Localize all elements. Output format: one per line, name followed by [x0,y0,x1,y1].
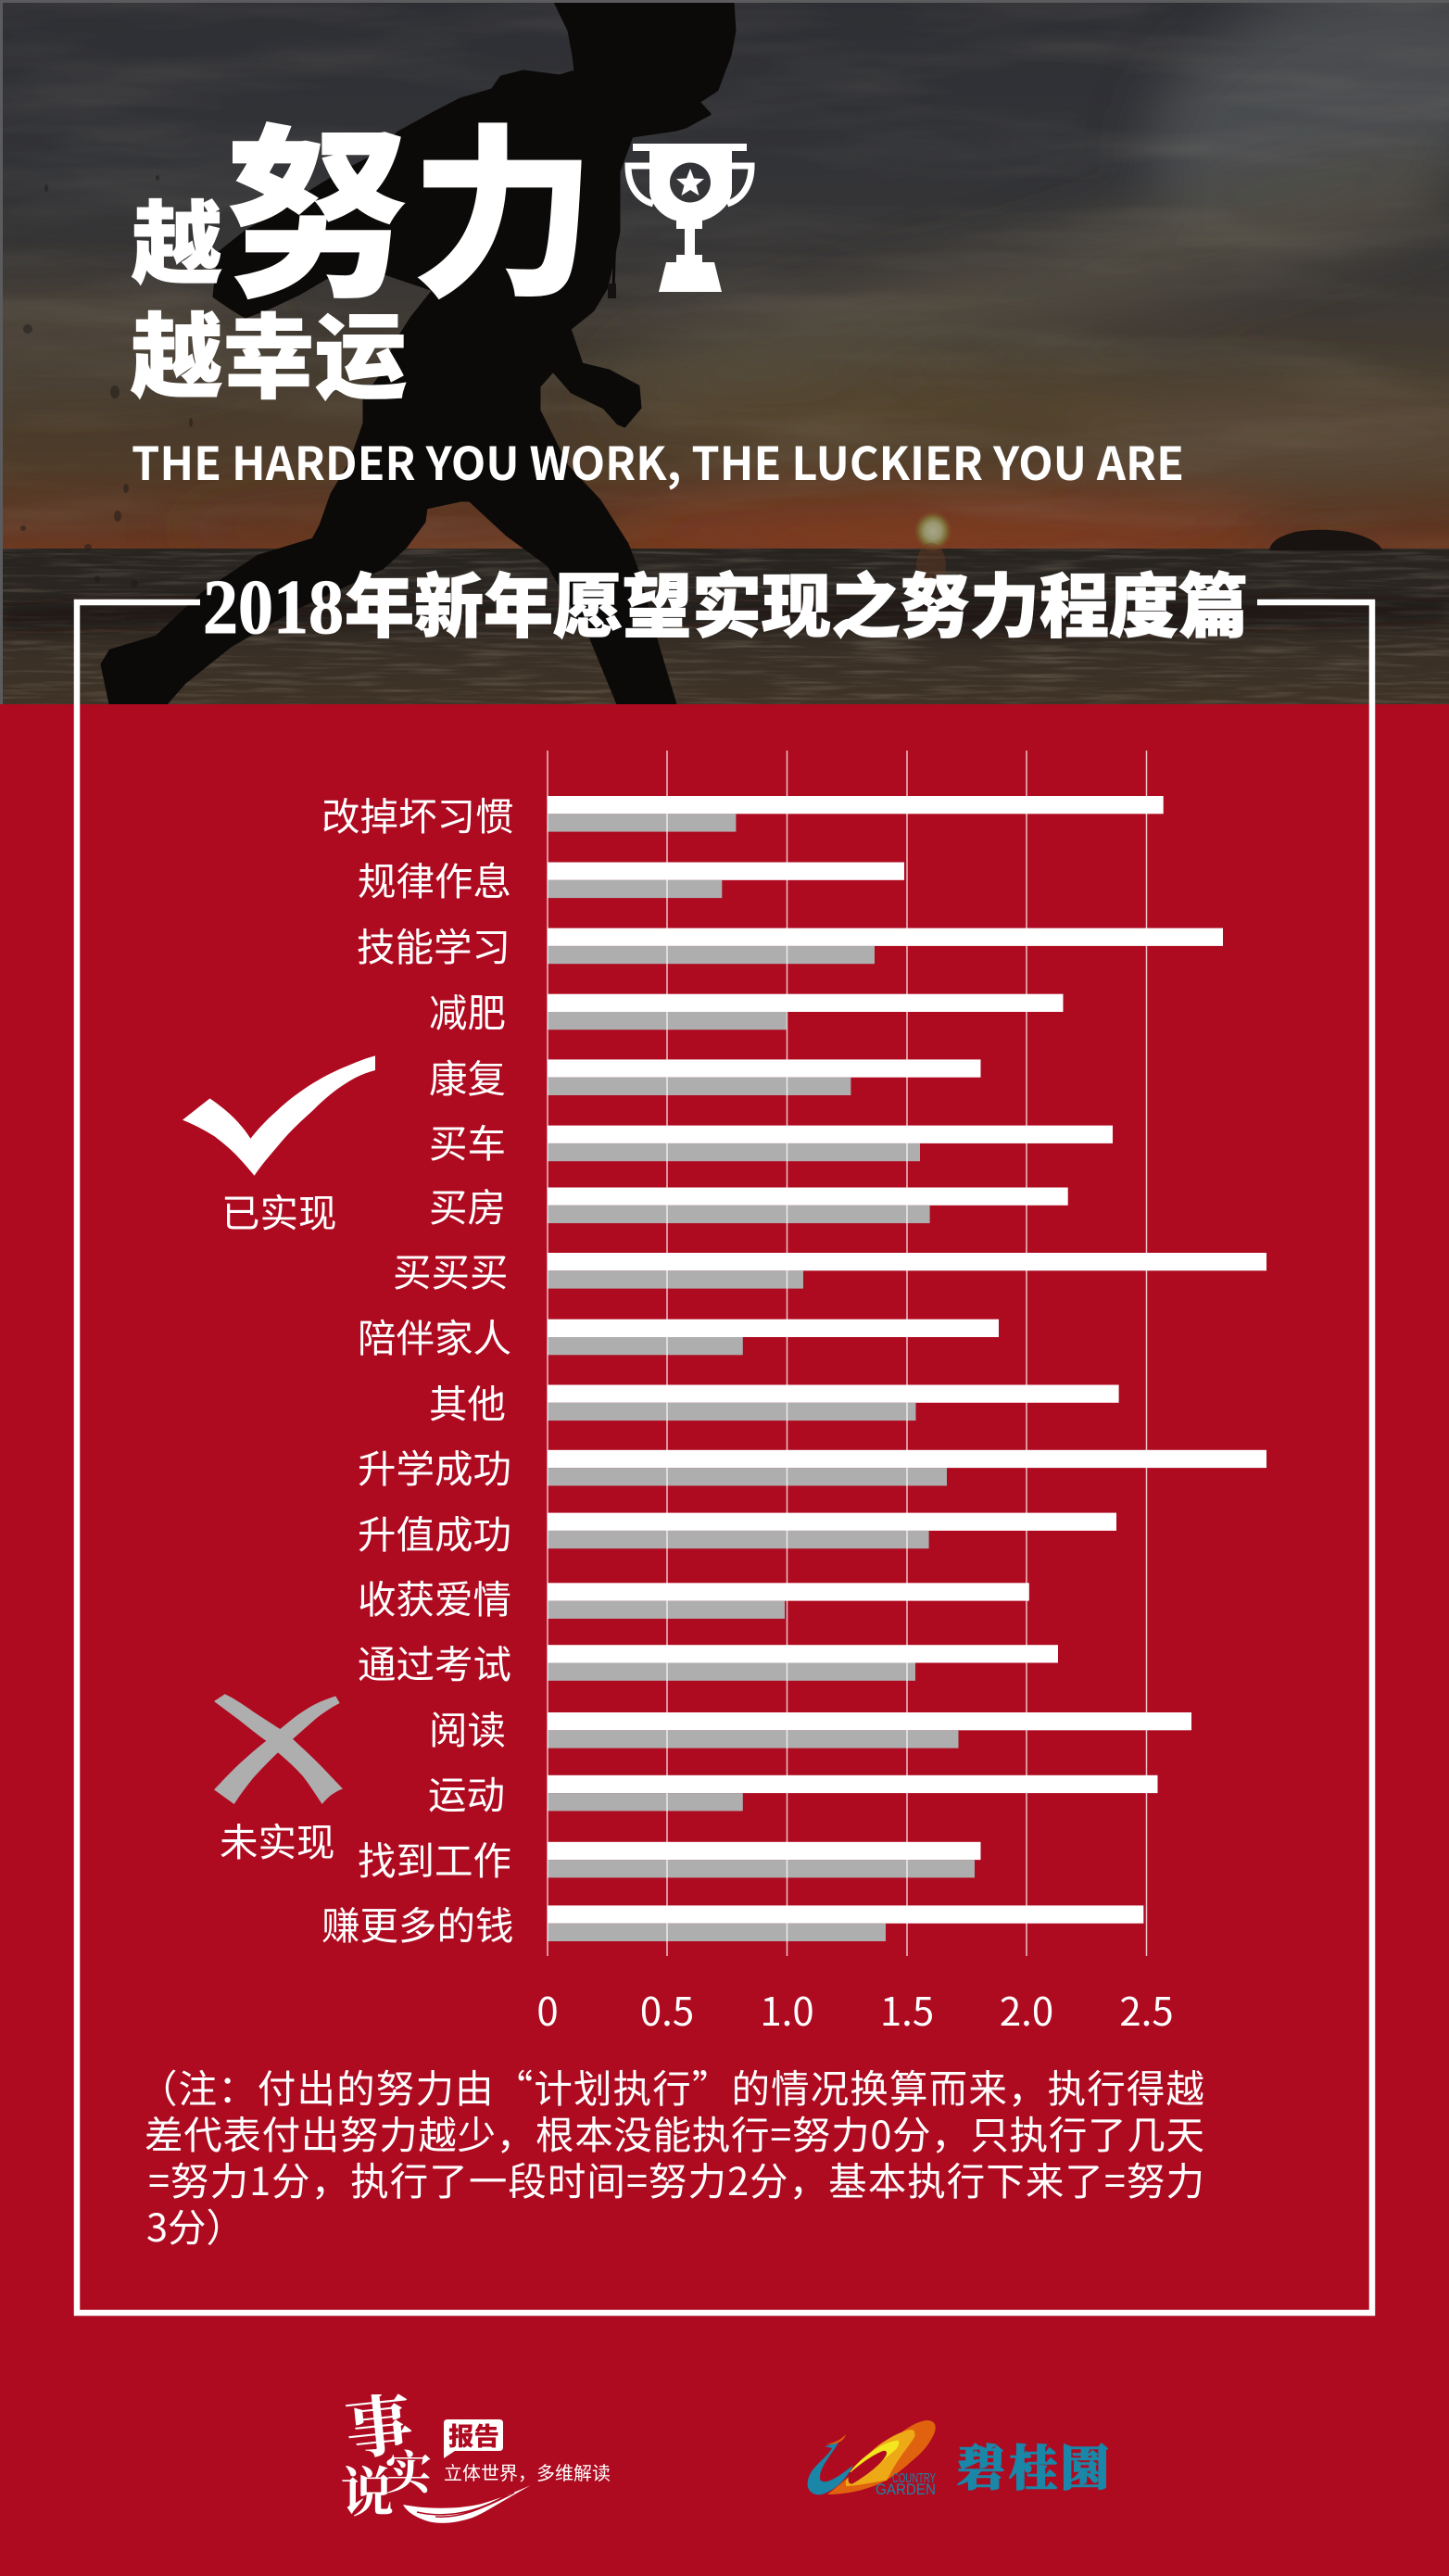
row: 陪伴家人: 陪伴家人 [358,1307,511,1363]
row: 升学成功 [358,1438,1266,1494]
runner silhouette [102,2,735,704]
row: 技能学习 [357,916,1223,972]
row: 康复: 康复 [429,1048,506,1104]
chart title: 年新年愿望实现之努力程度篇 [345,550,1248,651]
x axis tick labels: 1.0 [760,1981,814,2038]
legend label: 未实现: 未实现 [220,1812,335,1867]
logo: 碧桂园 Country Garden [808,2420,1109,2499]
row: 升值成功 [358,1504,1116,1559]
logo: 事实说报告: 说 [340,2449,394,2527]
header photo: runner on the beach at sunset [0,0,1449,706]
logo: 碧桂园 Country Garden: GARDEN [876,2481,936,2498]
row: 阅读: 阅读 [429,1699,506,1755]
x axis tick labels: 0 [536,1981,559,2038]
icon: cross mark [214,1694,343,1804]
row: 买房: 买房 [429,1177,506,1232]
brush swoosh [403,2485,531,2523]
lanyard whistle [613,236,615,287]
logo: 事实说报告 [340,2370,611,2527]
island [1269,530,1382,550]
footnote text: （注：付出的努力由“计划执行”的情况换算而来，执行得越 [139,2058,1204,2114]
row: 规律作息 [358,851,904,906]
heading: 越努力越幸运: 努力 [225,66,596,335]
row: 找到工作 [358,1830,980,1886]
bar chart: effort by wish [321,751,1266,2038]
row: 买房 [429,1177,1068,1232]
subtitle: english tagline: THE HARDER YOU WORK, THE LUCKIER YOU ARE [132,428,1184,494]
x axis tick labels: 1.5 [880,1981,934,2038]
row: 运动 [428,1764,1158,1820]
heading: 越努力越幸运: 越幸运 [131,283,407,417]
row: 买车: 买车 [429,1113,506,1168]
row: 康复 [429,1048,980,1104]
logo: 事实说报告: 立体世界，多维解读 [444,2458,611,2485]
chart title: 2018 [203,564,344,650]
logo: 碧桂园 Country Garden: COUNTRY [892,2470,936,2486]
row: 收获爱情: 收获爱情 [358,1569,511,1624]
icon: trophy [628,144,751,292]
speech bubble: 报告 [444,2419,503,2458]
row: 运动: 运动 [428,1764,505,1820]
footnote text: =努力1分，执行了一段时间=努力2分，基本执行下来了=努力 [148,2151,1204,2206]
footnote text: 3分） [146,2197,245,2253]
legend label: 已实现: 已实现 [221,1182,337,1238]
x axis tick labels: 2.0 [1000,1981,1053,2038]
row: 收获爱情 [358,1569,1029,1624]
row: 技能学习: 技能学习 [357,916,510,972]
row: 其他: 其他 [429,1373,506,1429]
row: 改掉坏习惯: 改掉坏习惯 [321,786,514,841]
row: 其他 [429,1373,1119,1429]
row: 赚更多的钱 [321,1895,1143,1951]
logo: 事实说报告: 事 [340,2370,417,2473]
footnote text [139,2058,1204,2253]
row: 减肥 [429,982,1064,1038]
row: 规律作息: 规律作息 [358,851,511,906]
row: 通过考试 [358,1634,1058,1689]
row: 升学成功: 升学成功 [358,1438,511,1494]
row: 找到工作: 找到工作 [358,1830,511,1886]
logo: 碧桂园 Country Garden: 碧桂園 [957,2430,1109,2499]
x axis tick labels [536,1981,1174,2038]
white outline frame [77,602,1372,2313]
row: 买买买 [393,1242,1266,1297]
water droplets [20,175,193,621]
phoenix emblem [808,2420,936,2494]
x axis tick labels: 0.5 [640,1981,694,2038]
logo: 事实说报告: 实 [385,2436,433,2503]
row: 升值成功: 升值成功 [358,1504,511,1559]
row: 改掉坏习惯 [321,786,1164,841]
heading: 越努力越幸运: 越 [132,171,222,303]
icon: check mark [183,1055,375,1176]
row: 通过考试: 通过考试 [358,1634,511,1689]
row: 买车 [429,1113,1113,1168]
row: 阅读 [429,1699,1191,1755]
row: 陪伴家人 [358,1307,999,1363]
heading: 越努力越幸运 [131,66,596,417]
row: 买买买: 买买买 [393,1242,509,1297]
sun [915,512,951,550]
logo: 事实说报告: 报告 [448,2417,499,2453]
row: 赚更多的钱: 赚更多的钱 [321,1895,514,1951]
footnote text: 差代表付出努力越少，根本没能执行=努力0分，只执行了几天 [145,2104,1204,2160]
x axis tick labels: 2.5 [1119,1981,1174,2038]
row: 减肥: 减肥 [429,982,506,1038]
